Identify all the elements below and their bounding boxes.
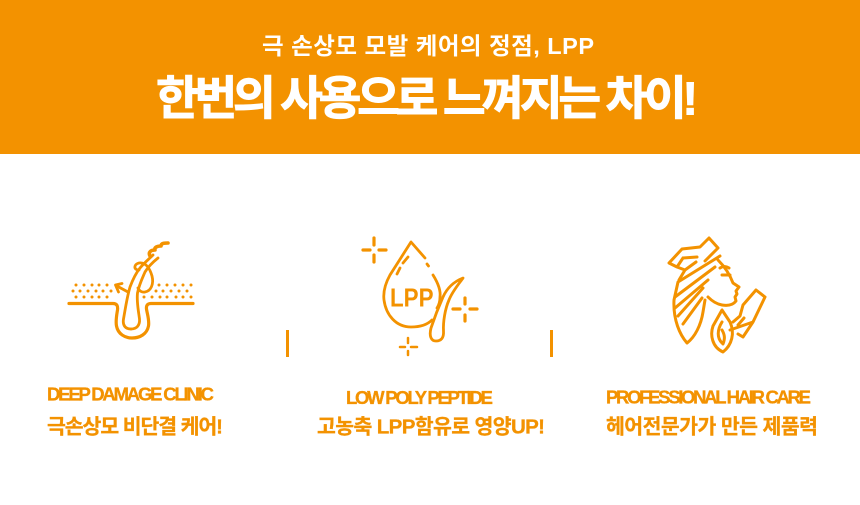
caption: professional hair care: 헤어전문가가 만든 제품력 [606,416,818,438]
divider right [550,330,553,357]
hair strand [430,278,463,341]
icon: hair follicle [69,243,193,338]
caption: low poly peptide [317,387,545,438]
caption: professional hair care: PROFESSIONAL HAIR CARE [606,386,811,408]
icon: LPP drop [363,238,477,355]
header banner [0,0,860,154]
icon: woman with hands [669,238,765,352]
caption: low poly peptide: 고농축 LPP함유로 영양UP! [317,416,545,438]
divider left [286,330,289,357]
caption: deep damage clinic: 극손상모 비단결 케어! [47,416,223,438]
sparkles [363,238,477,321]
caption: deep damage clinic [47,384,223,438]
caption: professional hair care [606,386,818,438]
caption: deep damage clinic: DEEP DAMAGE CLINIC [47,384,214,404]
label: LPP: LPP [390,282,434,312]
header title: 한번의 사용으로 느껴지는 차이! [156,72,698,124]
caption: low poly peptide: LOW POLY PEPTIDE [346,387,493,408]
header subtitle: 극 손상모 모발 케어의 정점, LPP [262,33,594,59]
